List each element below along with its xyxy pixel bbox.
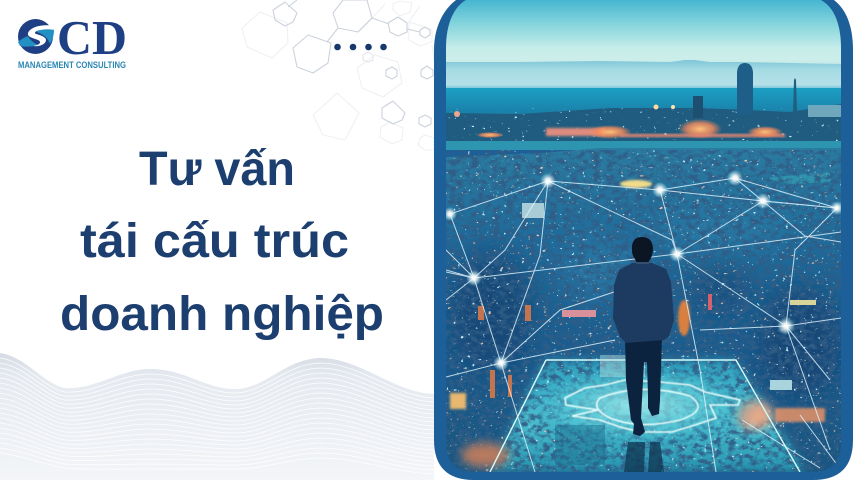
photo frame (434, 0, 853, 480)
logo letters CD: CD (57, 10, 127, 65)
sky (446, 0, 841, 64)
gear glyph on floor (565, 380, 740, 432)
photo: businessman over networked city (443, 0, 844, 475)
river right pool (765, 172, 830, 184)
dots (334, 44, 387, 50)
head (632, 237, 653, 264)
businessman (613, 237, 674, 436)
decorative hexagon network (242, 0, 434, 150)
main tower (737, 63, 753, 115)
wave line pattern (0, 353, 434, 480)
city texture (446, 150, 841, 475)
collar (636, 262, 649, 264)
right buildings (808, 105, 841, 117)
title line 1: Tư vấn (139, 143, 295, 196)
mast (793, 78, 797, 112)
city ground (446, 148, 841, 475)
trousers and shoes (625, 338, 662, 436)
sea (446, 88, 841, 114)
logo tagline: MANAGEMENT CONSULTING (18, 59, 126, 70)
title (60, 143, 384, 341)
river (446, 141, 841, 150)
logo ring (18, 19, 55, 54)
network lines (446, 178, 841, 472)
distant city band (446, 104, 841, 142)
logo (18, 10, 127, 70)
warm city lights (450, 180, 825, 467)
secondary tower (693, 96, 703, 118)
glowing floor platform base (490, 360, 806, 472)
harbour lights (454, 104, 785, 139)
title line 2: tái cấu trúc (80, 215, 349, 268)
distant mountains and haze (446, 60, 841, 89)
dark and light city zones (450, 205, 840, 395)
glowing floor platform (490, 355, 800, 472)
title line 3: doanh nghiệp (60, 288, 384, 341)
jacket (613, 263, 674, 343)
businessman reflection (624, 442, 664, 472)
network nodes (443, 170, 844, 371)
